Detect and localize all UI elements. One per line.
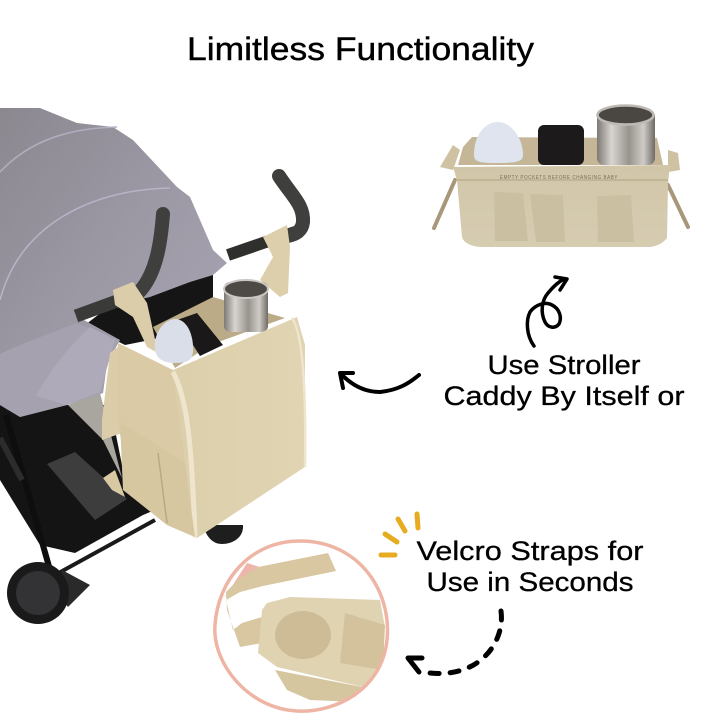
bag: straps	[113, 225, 290, 353]
pocket opening	[340, 613, 385, 670]
caption: use stroller caddy: Caddy By Itself or	[444, 381, 685, 411]
caddy handles	[434, 180, 688, 228]
phone	[538, 125, 584, 165]
icon: yellow sparkle lines	[381, 514, 418, 555]
steel cup	[597, 106, 655, 165]
canopy	[0, 108, 227, 417]
caption: velcro straps: Use in Seconds	[426, 567, 634, 597]
top right product: caddy with bottle, phone and cup	[434, 106, 688, 247]
icon: curly arrow up	[527, 277, 567, 346]
bag: contents	[153, 280, 285, 368]
bag: body	[102, 317, 305, 538]
bottle	[474, 122, 523, 163]
circle outline	[215, 541, 387, 711]
title: Limitless Functionality	[187, 31, 534, 67]
cup hole	[275, 611, 331, 659]
circle clipped photo	[225, 553, 385, 702]
icon: curved arrow left	[340, 373, 419, 392]
icon: dashed curved arrow	[408, 611, 501, 673]
caddy body top	[258, 597, 385, 688]
caption: velcro straps: Velcro Straps for	[416, 536, 644, 566]
stroller frame and basket	[0, 272, 243, 624]
caption: velcro straps	[416, 536, 644, 597]
velcro strap	[226, 553, 336, 647]
caption: use stroller caddy: Use Stroller	[488, 350, 640, 380]
ruffled pocket	[275, 670, 367, 702]
caddy back rim	[458, 137, 663, 165]
hand	[225, 563, 260, 597]
caption: use stroller caddy	[444, 350, 685, 411]
stroller with attached bag	[0, 108, 305, 624]
caddy printed text: EMPTY POCKETS BEFORE CHANGING BABY	[500, 175, 618, 181]
stroller handles	[76, 176, 303, 316]
velcro detail circle	[213, 539, 390, 713]
caddy body	[453, 165, 670, 247]
